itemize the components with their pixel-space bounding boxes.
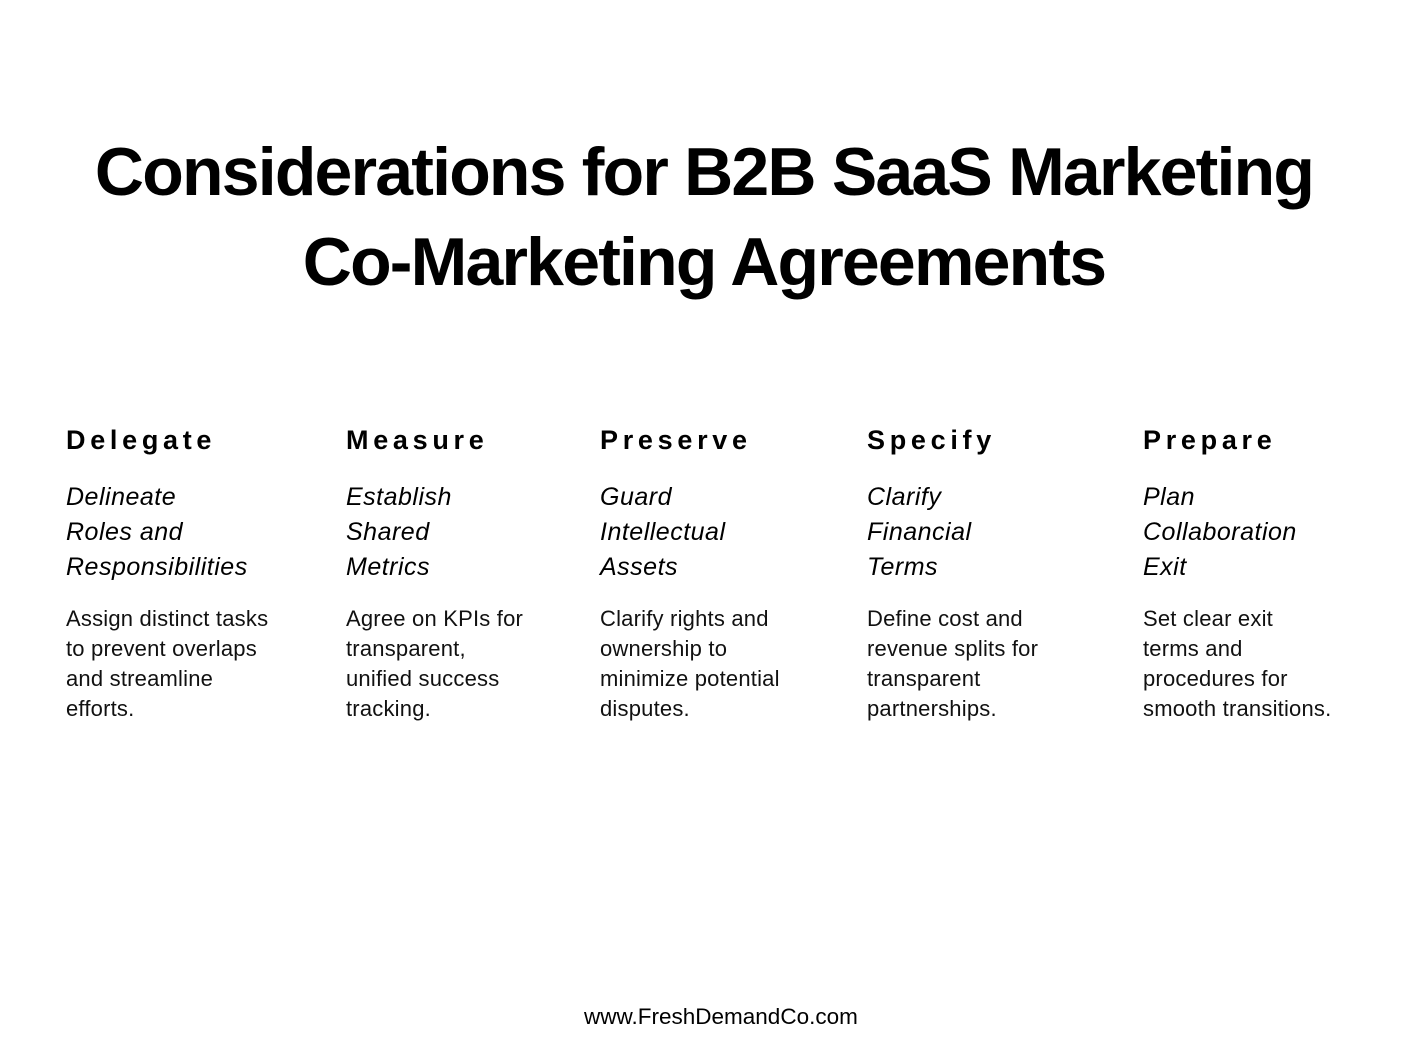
panel: delegate: Roles and <box>66 518 183 546</box>
panel: prepare: Collaboration <box>1143 518 1297 546</box>
panel: preserve: disputes. <box>600 696 690 721</box>
panel: measure: unified success <box>346 666 499 691</box>
panel: measure: Measure <box>346 425 488 455</box>
panel: preserve: Intellectual <box>600 518 726 546</box>
panel: preserve <box>598 425 780 721</box>
panel: preserve: Guard <box>600 483 672 511</box>
panel: prepare: procedures for <box>1143 666 1288 691</box>
panel: measure: Agree on KPIs for <box>346 606 523 631</box>
panel: specify: Define cost and <box>867 606 1023 631</box>
panel: specify: Financial <box>867 518 972 546</box>
title: Co-Marketing Agreements <box>303 224 1105 300</box>
panel: delegate: Responsibilities <box>66 553 248 581</box>
panel: delegate <box>66 425 268 721</box>
panel: delegate: and streamline <box>66 666 213 691</box>
panel: preserve: Assets <box>600 553 678 581</box>
panel: measure <box>346 425 523 721</box>
panel: delegate: Assign distinct tasks <box>66 606 268 631</box>
panel: delegate: Delineate <box>66 483 176 511</box>
panel: measure: Shared <box>346 518 430 546</box>
panel: measure: transparent, <box>346 636 466 661</box>
panel: specify: Specify <box>867 425 996 455</box>
panel: delegate: to prevent overlaps <box>66 636 257 661</box>
panel: specify: transparent <box>867 666 980 691</box>
panel: measure: Metrics <box>346 553 430 581</box>
panel: measure: tracking. <box>346 696 431 721</box>
panel: prepare: Plan <box>1143 483 1195 511</box>
panel: preserve: Clarify rights and <box>600 606 769 631</box>
panel: specify: partnerships. <box>867 696 997 721</box>
footer url: www.FreshDemandCo.com <box>584 1004 858 1029</box>
panel: delegate: efforts. <box>66 696 134 721</box>
panel: measure: Establish <box>346 483 452 511</box>
panel: preserve: minimize potential <box>600 666 780 691</box>
panel: delegate: Delegate <box>66 425 216 455</box>
panel: prepare: Set clear exit <box>1143 606 1273 631</box>
panel: prepare: terms and <box>1143 636 1243 661</box>
panel: preserve: Preserve <box>600 425 752 455</box>
title: Considerations for B2B SaaS Marketing <box>95 134 1313 210</box>
panel: specify <box>867 425 1038 721</box>
title <box>95 134 1313 300</box>
panel: specify: Clarify <box>867 483 941 511</box>
panel: prepare: smooth transitions. <box>1143 696 1331 721</box>
panel: prepare: Exit <box>1143 553 1187 581</box>
panel: prepare <box>1143 425 1331 721</box>
panel: prepare: Prepare <box>1143 425 1276 455</box>
panel: specify: Terms <box>867 553 938 581</box>
panel: specify: revenue splits for <box>867 636 1038 661</box>
panel: preserve: ownership to <box>600 636 727 661</box>
